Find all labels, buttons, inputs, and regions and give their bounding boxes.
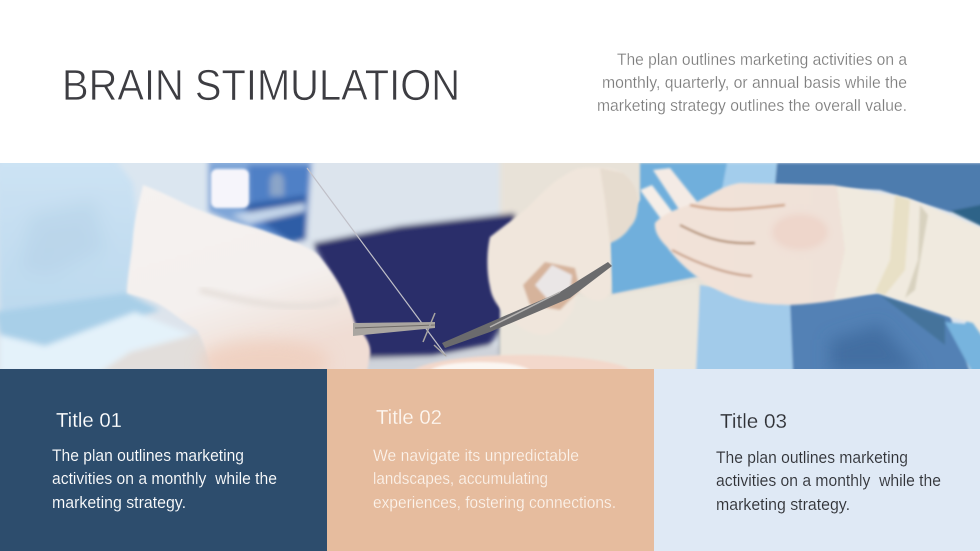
right hand <box>640 168 980 340</box>
thread <box>307 168 447 357</box>
intro text block: The plan outlines marketing activities on a <box>617 50 907 69</box>
body text: title 01: marketing strategy. <box>52 494 186 512</box>
body text: title 01 <box>52 447 277 512</box>
blue device <box>208 160 312 242</box>
left glove <box>127 185 370 372</box>
body text: title 02: We navigate its unpredictable <box>373 447 579 465</box>
body text: title 03: The plan outlines marketing <box>716 449 908 467</box>
body text: title 02: experiences, fostering connections. <box>373 494 616 512</box>
patient <box>414 354 628 369</box>
panel: title 02 <box>327 369 654 551</box>
navy box <box>313 213 520 358</box>
photo: surgeons' gloved hands with scissors <box>0 163 980 369</box>
blue gown, right surgeon <box>500 163 980 372</box>
intro text block: monthly, quarterly, or annual basis while the <box>602 73 907 92</box>
body text: title 02 <box>373 447 616 512</box>
intro text block: marketing strategy outlines the overall value. <box>597 96 907 115</box>
body text: title 02: landscapes, accumulating <box>373 470 548 488</box>
intro text block <box>597 50 907 115</box>
heading: title 01: Title 01 <box>56 410 122 432</box>
body text: title 01: The plan outlines marketing <box>52 447 244 465</box>
body text: title 01: activities on a monthly while the <box>52 470 277 488</box>
body text: title 03: marketing strategy. <box>716 496 850 514</box>
body text: title 03: activities on a monthly while the <box>716 472 941 490</box>
panel: title 01 <box>0 369 327 551</box>
left scissors <box>353 322 435 336</box>
left gown <box>0 163 209 369</box>
title: BRAIN STIMULATION <box>62 61 460 110</box>
heading: title 03: Title 03 <box>720 411 787 433</box>
white device square <box>211 169 249 208</box>
centre hand <box>485 172 640 311</box>
body text: title 03 <box>716 449 941 514</box>
panel: title 03 <box>654 369 980 551</box>
right scissors <box>442 262 612 348</box>
heading: title 02: Title 02 <box>376 407 442 429</box>
